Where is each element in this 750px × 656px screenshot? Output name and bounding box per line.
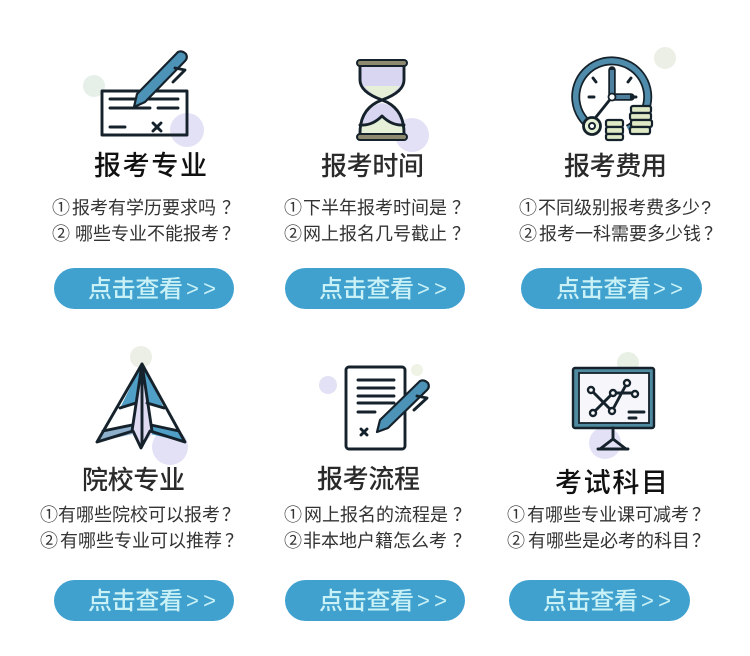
questions: 有哪些专业课可减考: [527, 505, 689, 525]
questions: ？: [704, 224, 722, 244]
panel: 院校专业: [40, 346, 243, 621]
icon: cheque and pen: [83, 51, 204, 147]
questions: 有哪些专业可以推荐: [60, 531, 222, 551]
icon: presentation board: [573, 352, 654, 459]
questions: ？: [225, 531, 243, 551]
button: 点击查看: [556, 276, 651, 303]
questions: ？: [222, 198, 240, 218]
questions: ①: [507, 505, 525, 525]
heading: 报考专业: [94, 151, 207, 181]
questions: 哪些专业不能报考: [75, 224, 219, 244]
icon: clock and coins: [576, 47, 676, 140]
questions: ②: [52, 224, 70, 244]
questions: ?: [701, 198, 711, 218]
questions: [52, 198, 240, 244]
button: [285, 580, 465, 621]
panel: 报考流程: [284, 364, 471, 621]
button: >>: [417, 588, 447, 613]
questions: ？: [222, 224, 240, 244]
heading: 院校专业: [82, 465, 185, 495]
questions: ？: [692, 505, 710, 525]
questions: 下半年报考时间是: [303, 198, 447, 218]
button: 点击查看: [88, 276, 183, 303]
heading: 考试科目: [555, 468, 668, 498]
panel: 报考时间: [284, 60, 470, 309]
questions: 网上报名的流程是: [304, 505, 448, 525]
heading: 报考流程: [317, 464, 420, 494]
questions: [507, 505, 710, 551]
questions: ②: [519, 224, 537, 244]
questions: ？: [692, 531, 710, 551]
button: 点击查看: [88, 588, 183, 615]
questions: 报考有学历要求吗: [72, 198, 216, 218]
button: >>: [417, 276, 447, 301]
heading: 报考时间: [321, 151, 424, 181]
panel: 报考专业: [52, 51, 240, 309]
panel: 考试科目: [507, 352, 710, 621]
questions: 有哪些院校可以报考: [58, 505, 220, 525]
questions: ②: [284, 531, 302, 551]
button: [54, 580, 234, 621]
questions: 有哪些是必考的科目: [528, 531, 690, 551]
button: [285, 268, 465, 309]
questions: ①: [519, 198, 537, 218]
button: >>: [641, 588, 671, 613]
button: 点击查看: [319, 588, 414, 615]
questions: 报考一科需要多少钱: [539, 224, 701, 244]
questions: 不同级别报考费多少: [538, 198, 700, 218]
questions: ？: [222, 505, 240, 525]
button: [509, 580, 690, 621]
questions: ？: [453, 505, 471, 525]
questions: ？: [452, 198, 470, 218]
questions: ①: [284, 198, 302, 218]
questions: ②: [507, 531, 525, 551]
questions: ②: [284, 224, 302, 244]
questions: [40, 505, 243, 551]
questions: [284, 505, 471, 551]
questions: [284, 198, 470, 244]
button: [54, 268, 234, 309]
button: 点击查看: [319, 276, 414, 303]
questions: ①: [40, 505, 58, 525]
button: >>: [186, 276, 216, 301]
panel: 报考费用: [519, 47, 722, 309]
questions: [519, 198, 722, 244]
questions: 网上报名几号截止: [303, 224, 447, 244]
questions: 非本地户籍怎么考: [303, 531, 447, 551]
button: [521, 268, 702, 309]
button: 点击查看: [543, 588, 638, 615]
button: >>: [186, 588, 216, 613]
icon: paper plane: [97, 346, 188, 465]
questions: ①: [52, 198, 70, 218]
icon: hourglass: [357, 60, 429, 152]
icon: document and pen: [319, 364, 429, 449]
questions: ？: [453, 531, 471, 551]
questions: ①: [284, 505, 302, 525]
heading: 报考费用: [564, 151, 667, 181]
questions: ？: [452, 224, 470, 244]
questions: ②: [40, 531, 58, 551]
button: >>: [653, 276, 683, 301]
